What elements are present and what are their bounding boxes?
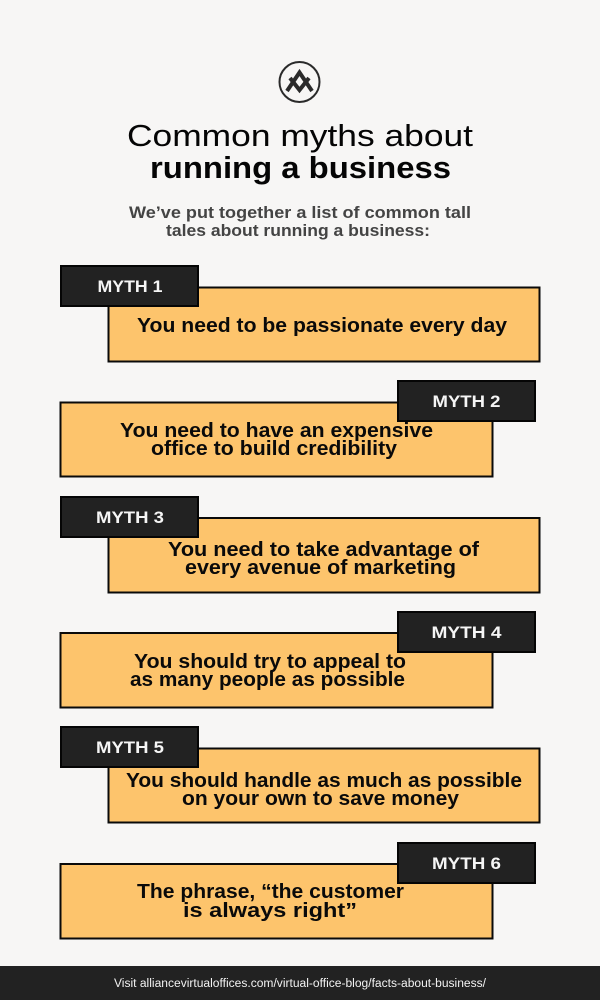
panel: myth 4 (60, 612, 535, 708)
panel: myth 6: MYTH 6 (432, 855, 501, 873)
panel: myth 5 (61, 727, 540, 822)
panel: myth 4: MYTH 4 (432, 624, 502, 642)
panel: myth 5: You should handle as much as possible (126, 770, 522, 792)
panel: myth 1: You need to be passionate every day (137, 315, 508, 337)
panel: myth 2 (60, 381, 535, 476)
panel: myth 3: You need to take advantage of (168, 539, 479, 561)
title (127, 118, 473, 185)
panel: myth 4: as many people as possible (130, 669, 405, 691)
panel: myth 3 (61, 497, 540, 592)
footer: Visit alliancevirtualoffices.com/virtual-office-blog/facts-about-business/ (114, 978, 487, 990)
panel: myth 1: MYTH 1 (98, 278, 162, 296)
logo icon (280, 62, 320, 102)
panel: myth 6: The phrase, “the customer (137, 881, 404, 903)
panel: myth 4: You should try to appeal to (134, 651, 406, 673)
title: running a business (150, 150, 451, 185)
panel: myth 6 (60, 843, 535, 938)
title: Common myths about (127, 118, 473, 153)
panel: myth 3: MYTH 3 (96, 509, 164, 527)
panel: myth 5: on your own to save money (182, 788, 460, 810)
panel: myth 2: office to build credibility (151, 438, 398, 460)
footer (0, 966, 600, 1000)
panel: myth 2: You need to have an expensive (120, 420, 433, 442)
panel: myth 6: is always right” (183, 900, 357, 922)
intro text: tales about running a business: (166, 221, 430, 240)
panel: myth 3: every avenue of marketing (185, 557, 456, 579)
intro text: We’ve put together a list of common tall (129, 203, 471, 222)
panel: myth 5: MYTH 5 (96, 739, 164, 757)
panel: myth 1 (61, 266, 540, 362)
intro text (129, 203, 471, 240)
panel: myth 2: MYTH 2 (432, 393, 500, 411)
